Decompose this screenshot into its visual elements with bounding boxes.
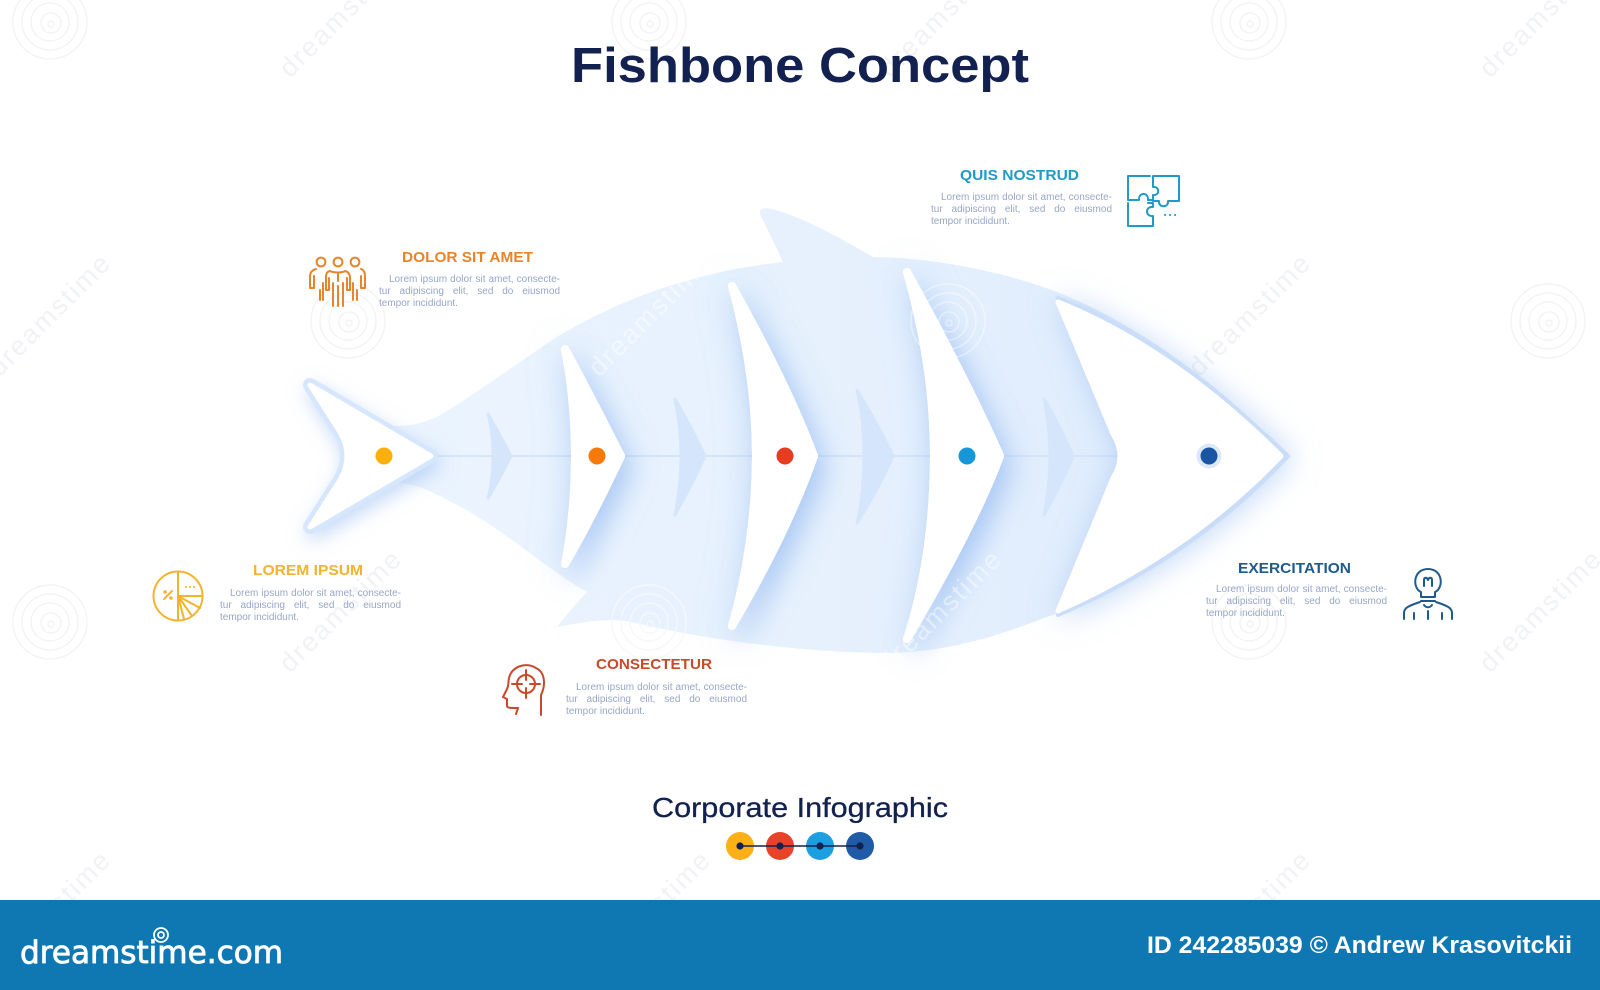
text block: tur adipiscing elit, sed do eiusmod: [1206, 596, 1387, 607]
footer banner: [0, 900, 1600, 990]
fishbone diagram: dreamstime: [873, 543, 1008, 678]
head segment: [1058, 298, 1288, 615]
rib 2: [732, 286, 814, 626]
icon: pie chart and heading: LOREM IPSUM: [253, 562, 363, 579]
icon: team and heading: DOLOR SIT AMET: [402, 249, 533, 266]
icon: pie chart and heading: [152, 562, 363, 622]
spine: [435, 455, 1117, 457]
text block: tempor incididunt.: [931, 216, 1010, 227]
icon: person with light bulb and heading: [1238, 560, 1453, 620]
text block: tur adipiscing elit, sed do eiusmod: [220, 600, 401, 611]
panel: quis nostrud: [931, 167, 1180, 227]
icon: head with target and heading: CONSECTETUR: [596, 656, 712, 673]
text block: Lorem ipsum dolor sit amet, consecte-: [576, 682, 747, 693]
tail segment: [310, 385, 431, 527]
text block: Lorem ipsum dolor sit amet, consecte-: [941, 192, 1112, 203]
panel: exercitation: [1206, 560, 1453, 620]
icon: head with target and heading: [502, 656, 712, 716]
panel: consectetur: [502, 656, 747, 717]
fish body silhouette: [388, 208, 1290, 653]
text block: tempor incididunt.: [1206, 608, 1285, 619]
icon: puzzle and heading: [960, 167, 1180, 227]
title: Fishbone Concept: [571, 39, 1029, 93]
logo spiral: [154, 928, 168, 942]
text block: [220, 588, 401, 623]
rib 3: [907, 272, 1000, 639]
logo wordmark: dreamstime.com: [20, 935, 283, 971]
text block: [379, 274, 560, 309]
text block: [1206, 584, 1387, 619]
text block: Lorem ipsum dolor sit amet, consecte-: [1216, 584, 1387, 595]
fishbone diagram: dreamstime: [582, 247, 717, 382]
panel: lorem ipsum: [152, 562, 401, 623]
subtitle and colour key: [652, 792, 948, 860]
text block: [566, 682, 747, 717]
fishbone diagram: dreamstime: [273, 543, 408, 678]
fishbone diagram: dreamstime: [1182, 247, 1317, 382]
text block: tur adipiscing elit, sed do eiusmod: [566, 694, 747, 705]
text block: tur adipiscing elit, sed do eiusmod: [931, 204, 1112, 215]
text block: tempor incididunt.: [566, 706, 645, 717]
text block: Lorem ipsum dolor sit amet, consecte-: [389, 274, 560, 285]
node markers: [376, 444, 1222, 468]
text block: Lorem ipsum dolor sit amet, consecte-: [230, 588, 401, 599]
text block: tempor incididunt.: [379, 298, 458, 309]
icon: person with light bulb and heading: EXERCITATION: [1238, 560, 1351, 577]
text block: [931, 192, 1112, 227]
text block: tur adipiscing elit, sed do eiusmod: [379, 286, 560, 297]
image id and credit: ID 242285039 © Andrew Krasovitckii: [1147, 932, 1572, 959]
text block: tempor incididunt.: [220, 612, 299, 623]
icon: puzzle and heading: QUIS NOSTRUD: [960, 167, 1079, 184]
subtitle and colour key: Corporate Infographic: [652, 792, 948, 823]
panel: dolor sit amet: [309, 249, 560, 309]
rib 1: [565, 349, 621, 564]
small chevrons: [488, 390, 1073, 523]
icon: team and heading: [309, 249, 533, 307]
